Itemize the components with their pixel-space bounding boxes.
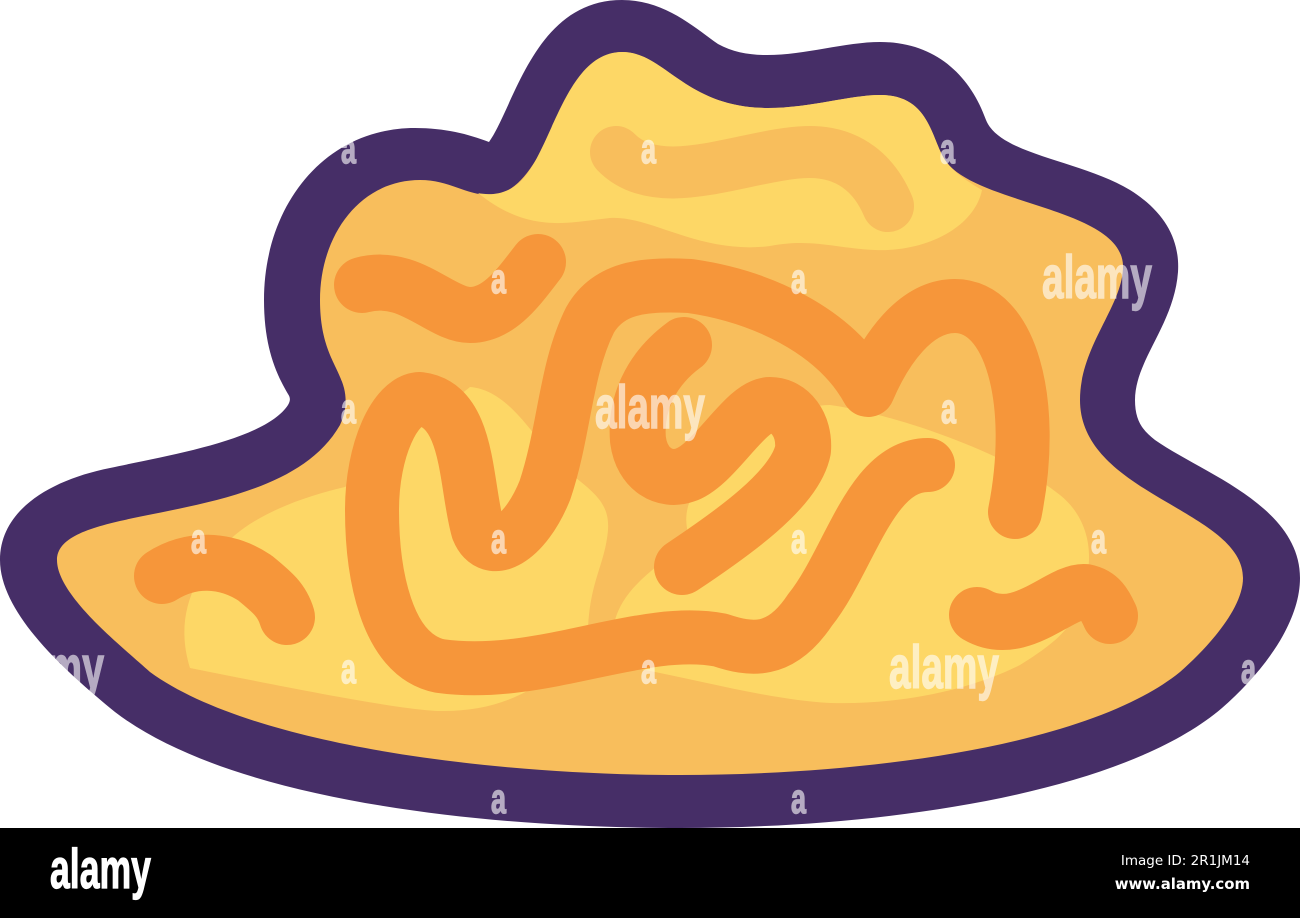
pale orange top noodle <box>616 152 888 206</box>
stock watermarks: a <box>491 775 506 822</box>
stock watermarks: a <box>1241 645 1256 692</box>
noodle: lower right squiggle <box>977 592 1110 622</box>
stock watermarks: alamy <box>595 374 705 441</box>
stock watermarks: alamy <box>1042 244 1152 311</box>
stock watermarks: a <box>491 255 506 302</box>
noodle: center curl <box>638 345 803 567</box>
stock watermarks: a <box>940 125 955 172</box>
yellow lower-right patch <box>615 405 1089 703</box>
yellow top mound <box>478 52 982 250</box>
stock watermarks: a <box>341 645 356 692</box>
image id: Image ID: 2R1JM14 <box>1121 853 1250 869</box>
stock watermarks: a <box>641 645 656 692</box>
yellow lower-left patch <box>184 387 608 711</box>
stock watermarks: a <box>791 775 806 822</box>
stock watermarks: a <box>191 515 206 562</box>
stock watermarks: a <box>791 255 806 302</box>
noodle: upper left squiggle <box>362 262 538 315</box>
stock watermarks <box>47 125 1256 822</box>
website: www.alamy.com <box>1115 875 1250 893</box>
noodle: main long strand <box>372 285 1023 668</box>
black footer bar <box>0 828 1300 918</box>
stock watermarks: a <box>1091 515 1106 562</box>
stock watermarks: a <box>341 385 356 432</box>
stock watermarks: my <box>47 634 104 701</box>
orange noodles <box>162 262 1110 668</box>
orange plate body <box>57 52 1243 775</box>
stock watermarks: a <box>791 515 806 562</box>
footer logo: alamy <box>50 837 151 900</box>
stock watermarks: a <box>491 515 506 562</box>
stock watermarks: a <box>341 125 356 172</box>
stock watermarks: a <box>641 125 656 172</box>
noodle: lower left arc <box>162 563 287 617</box>
stock watermarks: a <box>941 385 956 432</box>
stock watermarks: alamy <box>889 634 999 701</box>
